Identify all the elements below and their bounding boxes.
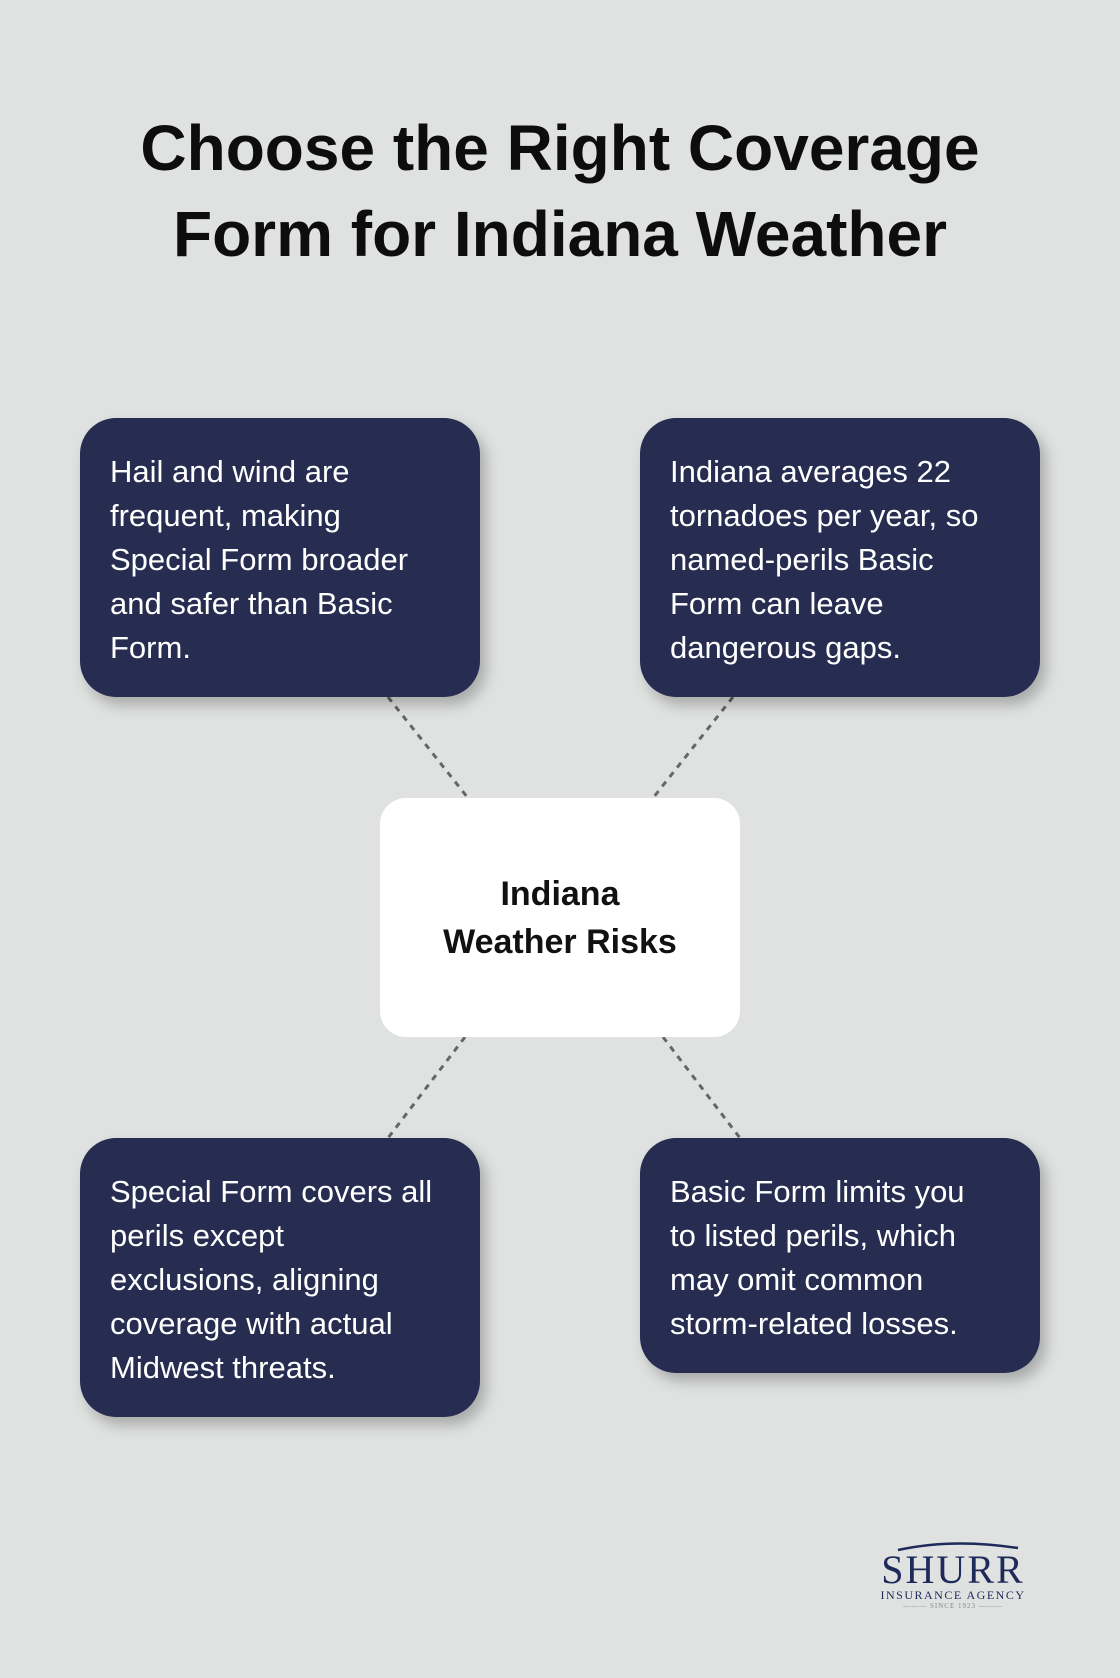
panel: top left — [80, 418, 480, 697]
center hub: Weather Risks — [443, 922, 677, 960]
panel: top right: Form can leave — [670, 586, 884, 621]
panel: bottom right: Basic Form limits you — [670, 1174, 965, 1209]
title: Form for Indiana Weather — [173, 198, 947, 270]
panel: bottom left: Midwest threats. — [110, 1350, 336, 1385]
center hub: Indiana — [500, 874, 620, 912]
panel: bottom left: perils except — [110, 1218, 284, 1253]
panel: top right — [640, 418, 1040, 697]
title — [140, 112, 980, 270]
panel: top left: frequent, making — [110, 498, 341, 533]
panel: top right: dangerous gaps. — [670, 630, 901, 665]
panel: top left: Hail and wind are — [110, 454, 350, 489]
panel: bottom right — [640, 1138, 1040, 1373]
panel: bottom left: exclusions, aligning — [110, 1262, 379, 1297]
logo: ——— SINCE 1923 ——— — [903, 1602, 1003, 1610]
panel: top right: Indiana averages 22 — [670, 454, 951, 489]
panel: bottom right: to listed perils, which — [670, 1218, 956, 1253]
panel: top left: Special Form broader — [110, 542, 408, 577]
panel: bottom right: may omit common — [670, 1262, 923, 1297]
panel: bottom left — [80, 1138, 480, 1417]
title: Choose the Right Coverage — [140, 112, 980, 184]
panel: bottom left: coverage with actual — [110, 1306, 393, 1341]
logo: INSURANCE AGENCY — [880, 1588, 1026, 1602]
center hub — [380, 798, 740, 1037]
panel: bottom left: Special Form covers all — [110, 1174, 432, 1209]
logo — [880, 1542, 1026, 1610]
panel: top left: Form. — [110, 630, 191, 665]
panel: top right: tornadoes per year, so — [670, 498, 978, 533]
panel: bottom right: storm-related losses. — [670, 1306, 958, 1341]
panel: top left: and safer than Basic — [110, 586, 393, 621]
logo: SHURR — [881, 1547, 1025, 1592]
panel: top right: named-perils Basic — [670, 542, 934, 577]
